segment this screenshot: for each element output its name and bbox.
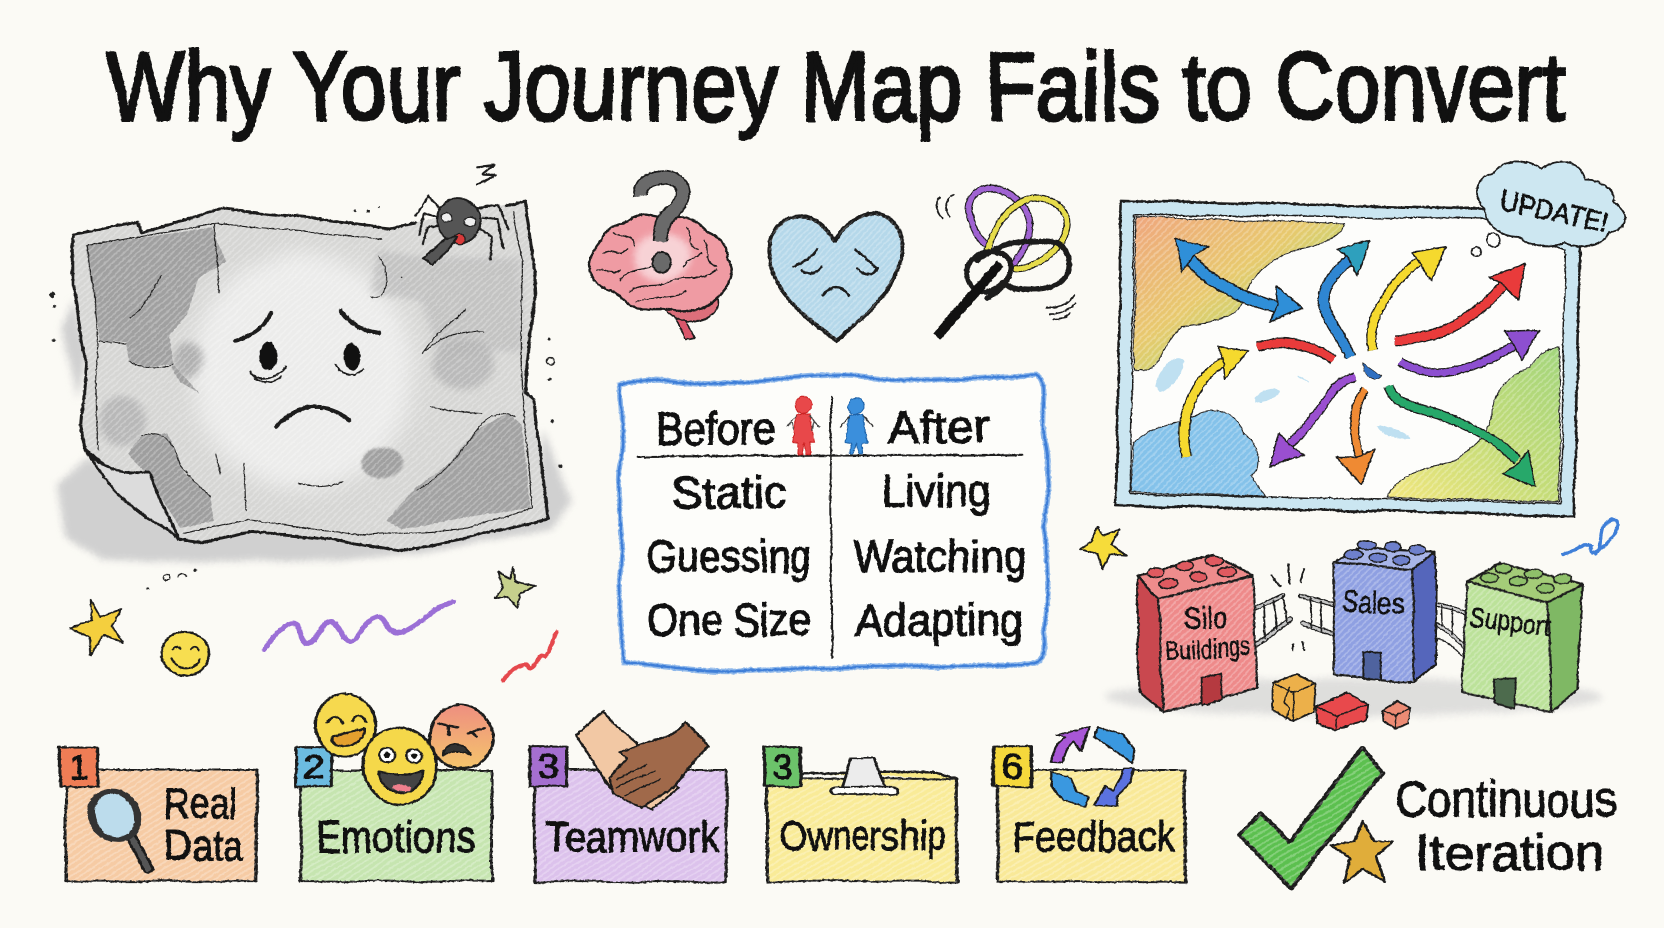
thought cloud: UPDATE!: UPDATE! [1496,183,1612,239]
icon: magnifying glass [87,789,150,870]
row: Guessing: Guessing [647,532,812,582]
card 2: Emotions: Emotions [316,813,476,862]
icon: green star [495,566,536,608]
arrow: blue to teal [1324,241,1370,357]
sleeping spider [415,166,509,265]
panel: living colourful map and silos [1079,162,1626,730]
broken bridge left [1255,564,1333,649]
row: Living: Living [882,467,992,517]
card 3: Teamwork: Teamwork [545,813,719,862]
icon: clip [830,758,898,794]
arrow: green [1388,387,1537,487]
panel: cards one to three [59,693,726,882]
bridge sales to support [1419,604,1463,655]
broken toy bricks [1273,673,1410,730]
map ground shadow [57,300,572,561]
purple squiggle [265,602,453,650]
card 1: Real Data [59,747,257,882]
arrow: yellow up [1372,246,1447,350]
card: Feedback [994,727,1185,882]
icon: red figure [787,397,821,455]
icon: tangled knot [937,188,1075,336]
icon: feedback cycle arrows [1051,727,1133,807]
panel: sad old map [49,166,572,680]
icon: blue figure [841,397,873,454]
icon: smiley [161,631,209,676]
silo: blue block: Sales [1341,585,1405,621]
scattered dots around map [49,205,563,589]
panel: center icons and before/after table [588,177,1075,672]
arrow: red [1396,263,1526,339]
row: Adapting: Adapting [855,596,1023,646]
text: Continuous Iteration [1396,771,1617,881]
row: Static: Static [672,469,787,518]
card 1: Real Data: Real [164,780,236,828]
card 3: Teamwork [530,712,726,882]
card 1: Real Data: Data [164,821,244,870]
row: One Size: One Size [647,596,812,646]
framed colourful map [1116,200,1581,516]
icon: gold star [1331,821,1394,882]
blue squiggle [1562,519,1618,555]
icon: big smile emoji [363,728,436,804]
card: Ownership: 3 [773,747,794,786]
card: Ownership: Ownership [780,813,946,859]
table header: After: After [887,403,990,453]
land: top left [1134,217,1344,370]
card 2: Emotions [295,693,493,882]
icon: handshake [576,712,708,810]
silo: red block: Silo [1183,603,1227,635]
sad face on map [234,311,379,427]
arrow: red segment [1257,342,1333,361]
red squiggle [503,632,557,680]
silo: red block: Buildings [1165,630,1252,666]
card: Ownership [764,747,957,882]
curled map corner [86,450,178,539]
thought cloud: UPDATE! [1471,162,1626,257]
land: bottom right [1387,346,1560,501]
silo ground shadows [1105,679,1602,716]
icon: sad blue heart [769,214,903,341]
arrow: purple down-left [1269,377,1354,466]
silo: blue block [1333,540,1436,683]
icon: green check mark [1238,748,1383,887]
icon: yellow star [71,599,122,655]
row: Watching: Watching [853,532,1027,582]
table header: Before: Before [655,405,777,455]
silo: green block [1462,562,1582,712]
land: bottom left sea [1131,411,1266,496]
arrow: orange down [1335,390,1376,485]
card: Feedback: Feedback [1013,813,1175,861]
panel: cards four and five, continuous iteration [764,727,1617,887]
icon: brain with question mark [588,177,731,339]
card 3: Teamwork: 3 [537,747,560,786]
yellow star [1079,527,1126,570]
card: Feedback: 6 [1001,747,1023,786]
arrow: purple right [1399,330,1540,373]
arrow: blue double [1174,239,1303,322]
silo: green block: Support [1468,601,1553,642]
arrow: yellow left [1184,346,1247,457]
silo: red block [1137,555,1258,712]
icon: angry emoji [429,705,493,768]
card 2: Emotions: 2 [302,747,325,786]
panel: before/after table [618,374,1048,672]
crumpled map sheet [73,200,548,552]
center blue drop [1363,363,1381,379]
card 1: Real Data: 1 [69,747,88,786]
icon: laughing emoji [316,693,377,757]
